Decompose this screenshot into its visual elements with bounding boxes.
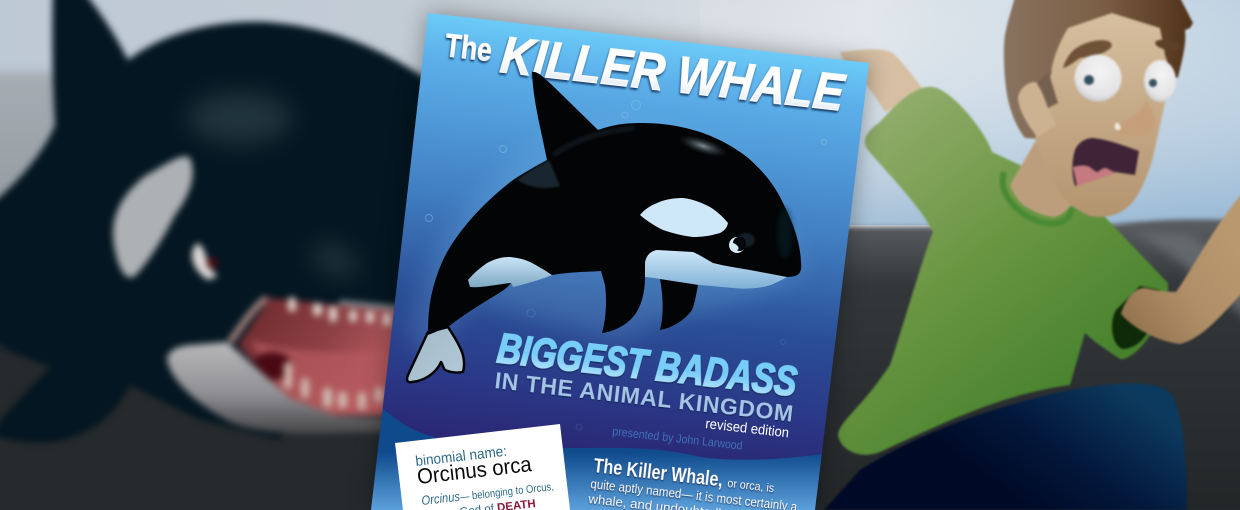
eye	[729, 237, 745, 253]
man face	[1035, 13, 1172, 217]
card paper	[395, 424, 570, 510]
blurred killer whale	[0, 0, 440, 443]
whale body	[0, 0, 440, 443]
man shirt	[838, 87, 1168, 455]
man left pupil	[1084, 75, 1094, 85]
bubbles	[426, 100, 826, 430]
man pants bottom	[824, 495, 1187, 510]
dark throat	[252, 352, 292, 380]
lower wave section	[371, 408, 822, 510]
man pants	[824, 383, 1187, 510]
revised edition: revised edition	[705, 415, 790, 440]
intro heading: The Killer Whale,	[592, 455, 724, 492]
whale upper teeth	[288, 297, 391, 326]
mouth interior	[235, 295, 410, 420]
whale mouth	[235, 295, 410, 420]
sweat drop	[1115, 122, 1121, 130]
man right pupil	[1149, 79, 1157, 87]
whale eye patch	[113, 156, 193, 277]
whale tail fluke	[407, 327, 464, 382]
back ridge	[553, 128, 635, 155]
dorsal fin and body	[428, 72, 801, 335]
intro text continued: or orca, is	[727, 476, 775, 495]
whale illustration	[407, 72, 801, 382]
man mouth	[1072, 138, 1139, 186]
title: The: The	[443, 27, 494, 68]
title: KILLER WHALE: KILLER WHALE	[498, 26, 848, 123]
presented by: presented by John Larwood	[612, 424, 743, 453]
species name: Orcinus orca	[416, 452, 533, 489]
gum edge	[230, 298, 267, 342]
man tongue	[1073, 166, 1116, 186]
whale lower jaw	[167, 342, 410, 434]
intro text	[587, 455, 798, 510]
man left eye	[1074, 54, 1122, 102]
poster: the killer whale	[371, 13, 869, 510]
man ear	[1018, 82, 1056, 137]
man right eyebrow	[1154, 38, 1182, 52]
man hair back	[1004, 0, 1193, 140]
poster background	[373, 13, 869, 510]
hair sideburn	[1037, 70, 1058, 108]
man right arm	[1121, 185, 1240, 344]
eye socket	[737, 233, 755, 247]
whale glow	[407, 150, 796, 352]
poster shadow	[371, 13, 869, 510]
binomial label: binomial name:	[415, 444, 508, 470]
second flipper	[660, 279, 698, 330]
whale red iris	[206, 258, 218, 268]
head shade	[777, 207, 793, 259]
whale nose highlight	[307, 237, 363, 283]
neck	[1010, 140, 1072, 217]
tongue	[250, 339, 383, 412]
pupil	[733, 237, 746, 251]
subtitle: biggest badass: BIGGEST BADASS	[495, 324, 799, 405]
collar	[1003, 172, 1072, 223]
eye patch	[640, 198, 728, 237]
sleeve opening	[1112, 286, 1160, 349]
title	[444, 33, 848, 114]
white lower jaw	[645, 250, 787, 289]
binomial name card	[395, 424, 570, 510]
fin base shine	[517, 160, 560, 188]
man nose	[1115, 100, 1155, 138]
man right eye	[1144, 60, 1176, 102]
white side patch	[468, 257, 552, 287]
etymology line 1: Orcinus— belonging to Orcus,	[421, 478, 554, 508]
subtitle: in the animal kingdom: IN THE ANIMAL KINGDOM	[493, 367, 794, 427]
whale lower teeth	[284, 362, 383, 410]
whale highlight	[188, 92, 292, 144]
whale eye	[192, 243, 218, 280]
man left eyebrow	[1063, 40, 1112, 68]
man panicking	[824, 0, 1240, 510]
back shine	[682, 136, 724, 156]
man left arm	[840, 49, 925, 112]
